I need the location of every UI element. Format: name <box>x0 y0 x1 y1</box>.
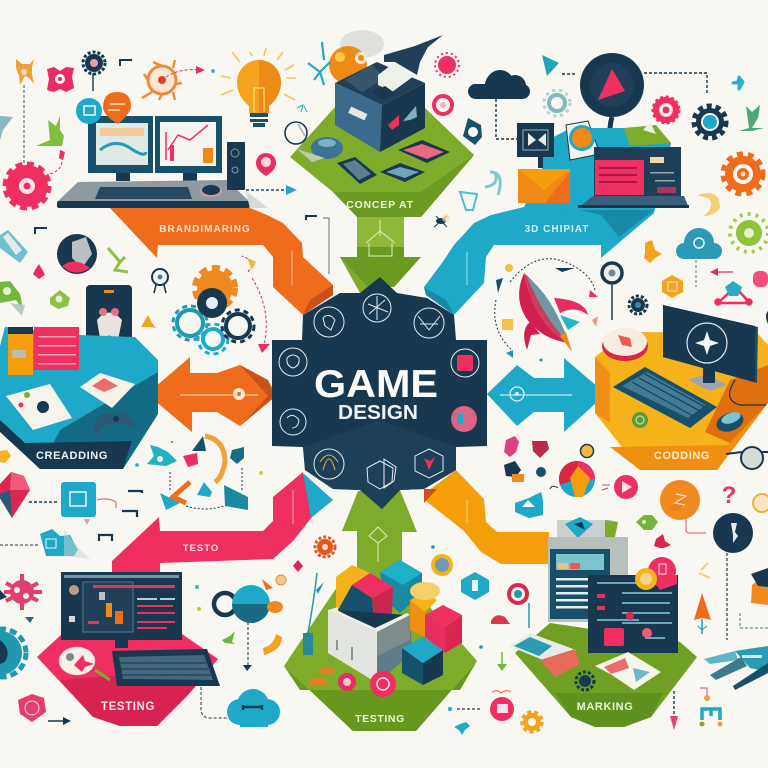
icons: lower centre badges <box>431 545 529 628</box>
connector lines: cloud and play <box>496 73 707 139</box>
icon: mouse on platform <box>297 137 343 162</box>
icon: pink chip <box>753 271 768 287</box>
icon: pink badge and coin <box>635 557 677 590</box>
icon: dark lens with pin <box>602 263 622 320</box>
panel: creadding platform <box>0 327 158 469</box>
icon: laptop <box>578 147 689 208</box>
icon: small dark gear <box>629 296 647 314</box>
panel: concept art platform <box>290 107 474 293</box>
icons: scattered central right icons <box>504 436 594 489</box>
panel: coding platform <box>595 305 768 470</box>
icon: brackets <box>35 60 329 274</box>
arrow: green up from test platform <box>284 490 477 731</box>
arrow: dark down to pink <box>670 691 678 730</box>
icon: gray display <box>548 537 628 622</box>
icon: orange creature <box>16 59 34 85</box>
icon: orange gear <box>723 154 763 194</box>
icon: network triangle <box>716 281 752 304</box>
icon: orange gear small <box>293 537 335 572</box>
arrow band: 3D chipiat <box>424 207 654 315</box>
icon: teal half gear <box>0 629 26 677</box>
icon: dark gear on platform <box>576 672 594 690</box>
arrow band: orange lower right <box>424 470 549 564</box>
icon: coins <box>308 668 396 697</box>
icon: pink ring badges <box>434 53 459 114</box>
icon: dark gear <box>694 106 726 138</box>
icon: teal chip above monitor <box>557 517 618 540</box>
icon: teal tablet with arrows <box>29 482 116 525</box>
icon: small monitor sign <box>517 123 554 168</box>
icon: game controller <box>93 412 136 436</box>
icons: speech bubbles <box>76 92 131 124</box>
icon: orange sun with arrow <box>142 60 205 100</box>
arrow: teal right <box>487 358 606 432</box>
icon: right edge dark circle <box>766 311 768 324</box>
panel: testing platform: TESTING <box>101 701 155 713</box>
arrow: small pink <box>710 268 733 276</box>
arrow band: testo: TESTO <box>183 543 219 554</box>
panel: test platform contents: TESTING <box>355 713 405 725</box>
icon: dark globe <box>57 234 97 274</box>
icon: pale gear <box>544 90 570 116</box>
icon: teal cup <box>460 192 477 210</box>
icon: right medallion <box>753 494 768 512</box>
icon: dark crescent <box>463 118 482 145</box>
icon: light bulb <box>221 48 296 127</box>
icon: pink pin <box>256 153 276 176</box>
icon: mouse <box>714 409 746 435</box>
icon: right edge orange figure <box>740 568 768 628</box>
icons: green blobs left <box>0 281 70 316</box>
panel: marketing platform: MARKING <box>577 701 633 713</box>
icon: teal cloud <box>676 228 722 287</box>
arrow band: brandmaking <box>110 208 333 315</box>
icon: medal <box>152 269 168 293</box>
icon: pink star <box>33 264 45 279</box>
arrow band: brandmaking: BRANDIMARING <box>159 224 251 235</box>
icon: magnifier plate <box>59 647 110 680</box>
icon: code monitor <box>61 572 182 640</box>
icon: green creature <box>36 116 65 160</box>
icons: circular line icons <box>279 294 444 489</box>
icon: green plant figure <box>739 105 764 131</box>
icons: puzzle arrows cluster <box>135 436 263 510</box>
icon: orange hex badge <box>662 275 683 298</box>
icon: envelope <box>518 169 570 203</box>
icon: pink virus gear <box>0 574 42 623</box>
icons: tablets on platform <box>337 140 450 184</box>
icon: teal triangle <box>542 55 559 76</box>
icon: keyboard <box>112 649 220 686</box>
arrow: dashed pink arc <box>242 256 270 353</box>
icon: pink hex badge and arrow <box>18 694 71 725</box>
icon: small teal star <box>733 77 743 89</box>
chart: pie icon <box>559 461 595 497</box>
panel: coding platform: CODDING <box>654 450 710 462</box>
panel: creadding platform: CREADDING <box>36 450 108 462</box>
icon: dark circle with figure and dashed line <box>713 513 753 640</box>
icon: magnifier circle <box>285 105 307 144</box>
icon: teal sprig <box>485 172 500 195</box>
icon: orange paper plane <box>694 563 711 634</box>
icon: fly <box>434 214 450 227</box>
icon: house outline <box>366 220 395 256</box>
arrow band: 3D chipiat: 3D CHIPIAT <box>525 224 589 235</box>
panel: center hexagon <box>272 277 487 509</box>
icon: green badge and pink star <box>636 515 671 548</box>
icon: orange blob <box>141 315 156 328</box>
panel: 3D platform <box>524 122 671 237</box>
icon: rocket <box>519 273 588 352</box>
arrow band: testo <box>112 472 333 572</box>
icon: eyeglass right <box>726 447 768 469</box>
icon: pink gem <box>0 450 30 518</box>
icon: monitor <box>663 305 766 405</box>
panel: brandmaking desk <box>57 116 268 208</box>
panel: concept art platform: CONCEP AT <box>346 199 414 211</box>
icon: teal cloud dumbbell <box>201 687 280 727</box>
icon: open book <box>595 652 661 690</box>
icon: card pile <box>80 373 135 408</box>
arrow: orange left <box>147 357 276 432</box>
icon: cloud <box>468 70 530 99</box>
icon: dark pin gear <box>83 52 105 91</box>
icon: teal fragment <box>0 116 13 140</box>
panel: marketing platform <box>509 517 697 727</box>
icon: photo card <box>566 121 600 160</box>
icon: gear cluster <box>173 268 254 354</box>
icon: green and orange marks <box>222 631 282 655</box>
icon: dark panel with lines <box>588 575 678 653</box>
icon: small teal dot <box>211 69 215 73</box>
icon: teal upward arrow <box>303 573 324 655</box>
connector: dashed line to pink gear <box>23 85 25 164</box>
icon: round plate <box>602 328 648 361</box>
icon: green badge <box>632 412 648 428</box>
icon: play circle <box>580 53 644 143</box>
icon: question mark: ? <box>722 482 736 509</box>
icon: green gear right <box>730 214 768 252</box>
icon: teal cartridge <box>0 230 28 263</box>
icon: teal bracket bottom right <box>700 688 722 726</box>
icon: pink gear <box>5 155 62 208</box>
icon: dark ring and globe <box>195 575 286 671</box>
panel: test platform contents <box>308 560 462 725</box>
icon: teal tag <box>0 529 90 559</box>
icon: pink play <box>602 475 638 499</box>
icon: keyboard <box>613 367 717 428</box>
icon: stacked cubes <box>328 560 462 685</box>
icon: teal shield <box>515 492 543 518</box>
connector: teal dashed arrow <box>246 185 297 195</box>
icon: molecule <box>308 42 330 85</box>
icon: magazines <box>509 633 580 677</box>
panel: testing platform <box>37 572 220 726</box>
icon: pink gear <box>653 97 679 123</box>
title: GAME: GAME <box>314 363 438 406</box>
icon: pink puzzle <box>47 67 74 92</box>
subtitle: DESIGN: DESIGN <box>338 402 418 424</box>
icons: small brackets <box>99 491 142 541</box>
icon: board game paper <box>6 384 72 430</box>
icons: bottom centre marks <box>448 691 514 735</box>
arrows: rocket orbit <box>495 259 598 362</box>
icon: orange puzzle <box>644 240 662 263</box>
icon: phone <box>86 285 132 363</box>
icon: crescent <box>698 193 720 216</box>
icon: orange speech circle <box>660 480 706 533</box>
icon: cards <box>8 327 79 375</box>
arrow: small green down <box>479 645 507 671</box>
icon: green lizard <box>108 248 128 272</box>
icon: orange gear bottom <box>522 712 542 732</box>
icon: spaceship <box>704 646 768 690</box>
panel: concept art crate <box>329 30 443 152</box>
